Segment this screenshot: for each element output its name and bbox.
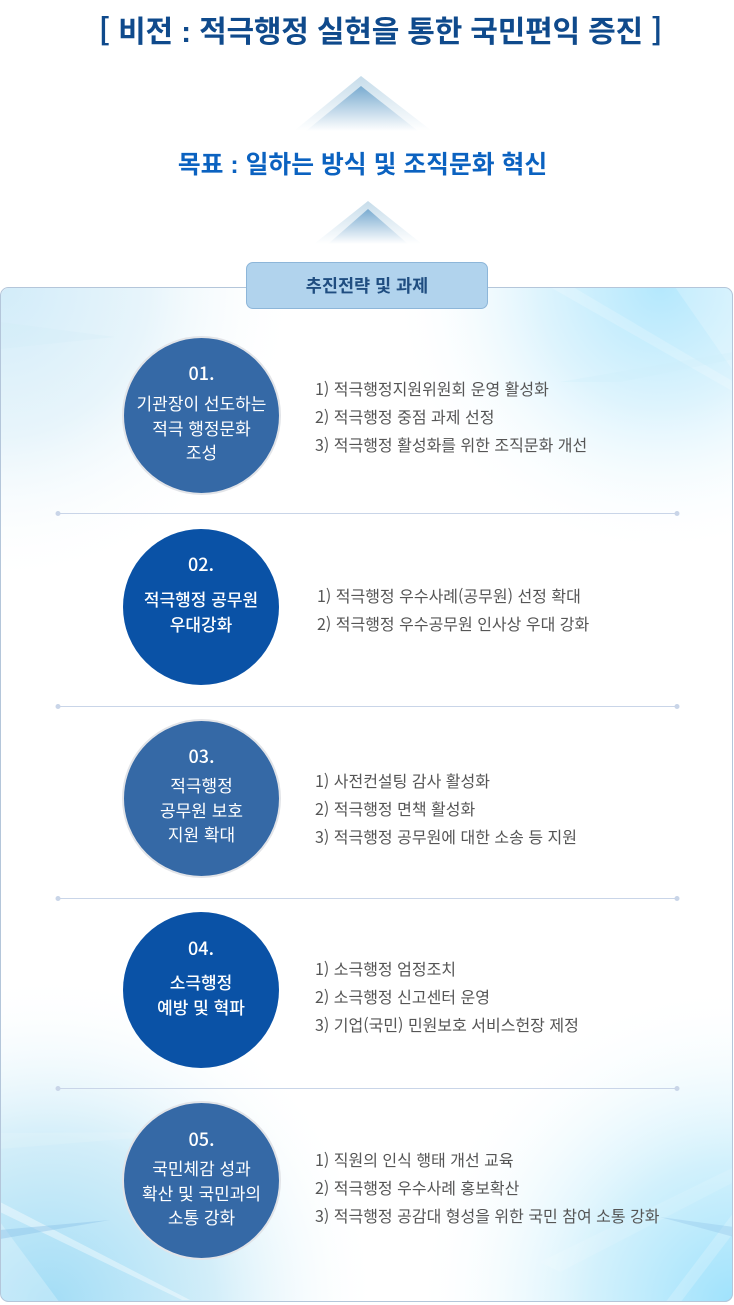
circle 03 bbox=[122, 719, 281, 878]
circle 02 bbox=[123, 529, 279, 685]
task list 04: 2) 소극행정 신고센터 운영 bbox=[315, 984, 490, 1008]
circle 05: 국민체감 성과 bbox=[152, 1155, 251, 1180]
task list 01: 1) 적극행정지원위원회 운영 활성화 bbox=[315, 376, 549, 400]
facets bottom left bbox=[0, 1202, 190, 1300]
task list 02: 1) 적극행정 우수사례(공무원) 선정 확대 bbox=[317, 583, 581, 607]
circle 02: 적극행정 공무원 bbox=[144, 586, 258, 611]
circle 05: 확산 및 국민과의 bbox=[142, 1180, 261, 1204]
facets bottom right bbox=[667, 1215, 732, 1301]
circle 03: 지원 확대 bbox=[168, 821, 235, 846]
facets top left bbox=[0, 322, 115, 349]
task list 01: 2) 적극행정 중점 과제 선정 bbox=[315, 404, 494, 428]
circle 03: 적극행정 bbox=[170, 772, 233, 797]
strategy heading tab bbox=[246, 262, 488, 309]
task list 01 bbox=[315, 376, 587, 456]
divider 3 bbox=[56, 896, 680, 901]
circle 02: 02. bbox=[188, 551, 214, 577]
task list 05: 2) 적극행정 우수사례 홍보확산 bbox=[315, 1175, 519, 1199]
task list 02: 2) 적극행정 우수공무원 인사상 우대 강화 bbox=[317, 611, 589, 635]
title: vision: [ 비전 : 적극행정 실현을 통한 국민편익 증진 ] bbox=[99, 7, 662, 51]
task list 05: 3) 적극행정 공감대 형성을 위한 국민 참여 소통 강화 bbox=[315, 1203, 660, 1227]
circle 05: 05. bbox=[189, 1126, 214, 1152]
task list 04: 1) 소극행정 엄정조치 bbox=[315, 956, 456, 980]
divider 4 bbox=[56, 1086, 680, 1091]
strategy heading tab: 추진전략 및 과제 bbox=[306, 273, 428, 298]
circle 03: 공무원 보호 bbox=[160, 796, 243, 822]
task list 05 bbox=[315, 1147, 660, 1227]
facets top right bbox=[571, 288, 702, 368]
task list 03: 2) 적극행정 면책 활성화 bbox=[315, 796, 475, 820]
task list 02 bbox=[317, 583, 589, 635]
divider 1 bbox=[56, 511, 680, 516]
task list 03: 3) 적극행정 공무원에 대한 소송 등 지원 bbox=[315, 824, 577, 848]
circle 04: 04. bbox=[188, 935, 214, 961]
circle 01 bbox=[122, 336, 281, 495]
task list 03 bbox=[315, 768, 577, 848]
task list 04 bbox=[315, 956, 579, 1036]
circle 05 bbox=[122, 1101, 281, 1260]
task list 01: 3) 적극행정 활성화를 위한 조직문화 개선 bbox=[315, 432, 587, 456]
circle 04 bbox=[123, 912, 279, 1068]
circle 04: 예방 및 혁파 bbox=[157, 994, 245, 1018]
divider 2 bbox=[56, 704, 680, 709]
circle 04: 소극행정 bbox=[170, 969, 232, 994]
arrow: upper triangle bbox=[304, 76, 421, 128]
arrow: lower triangle bbox=[323, 201, 412, 242]
task list 04: 3) 기업(국민) 민원보호 서비스헌장 제정 bbox=[315, 1012, 579, 1036]
task list 03: 1) 사전컨설팅 감사 활성화 bbox=[315, 768, 490, 792]
circle 05: 소통 강화 bbox=[168, 1204, 235, 1229]
circle 01: 조성 bbox=[186, 439, 217, 464]
circle 01: 기관장이 선도하는 bbox=[137, 390, 266, 415]
task list 05: 1) 직원의 인식 행태 개선 교육 bbox=[315, 1147, 514, 1171]
circle 02: 우대강화 bbox=[170, 610, 232, 636]
circle 01: 적극 행정문화 bbox=[152, 414, 251, 440]
circle 01: 01. bbox=[189, 360, 214, 386]
panel background with light blue facets bbox=[0, 287, 733, 1302]
goal heading: 목표 : 일하는 방식 및 조직문화 혁신 bbox=[178, 145, 547, 181]
circle 03: 03. bbox=[189, 743, 214, 769]
